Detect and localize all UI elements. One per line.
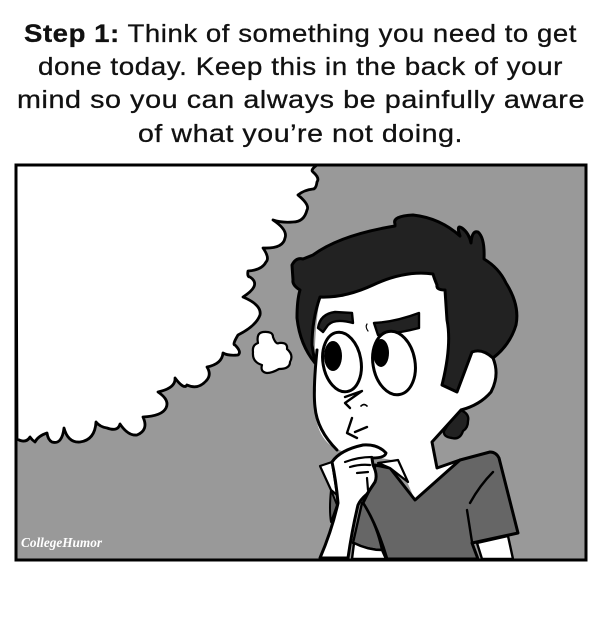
- right eyebrow: [374, 313, 419, 335]
- left eyebrow: [318, 312, 353, 332]
- heading: step 1 caption: mind so you can always be painfully aware: [17, 86, 585, 114]
- panel border: [16, 165, 586, 560]
- left eye: [318, 329, 366, 395]
- hair bump behind neck: [444, 409, 468, 438]
- heading: step 1 caption: Step 1: Think of something you need to get: [24, 20, 577, 48]
- neck and ear outline: [432, 358, 496, 468]
- panel background: [16, 165, 586, 560]
- logo: CollegeHumor: CollegeHumor: [21, 536, 103, 551]
- heading: step 1 caption: done today. Keep this in the back of your: [38, 53, 563, 81]
- heading: step 1 caption: of what you’re not doing.: [138, 120, 463, 148]
- nose: [345, 391, 362, 408]
- mouth: [347, 418, 367, 438]
- right arm: [477, 536, 513, 559]
- jaw outline: [314, 350, 337, 450]
- face and neck: [315, 272, 497, 500]
- left pupil: [324, 341, 342, 371]
- thought bubble: [16, 165, 318, 442]
- back sleeve: [330, 490, 337, 522]
- sleeve crease: [467, 472, 493, 542]
- fingers: [345, 457, 372, 490]
- shirt sliver beside forearm: [353, 503, 382, 550]
- right eye: [368, 328, 420, 398]
- back collar: [320, 462, 337, 495]
- character: [292, 215, 518, 559]
- small thought puff: [253, 332, 291, 373]
- panel: comic scene: [16, 165, 586, 560]
- heading: step 1 caption: [17, 20, 585, 148]
- forehead wrinkle: [366, 324, 368, 331]
- hand and forearm: [320, 445, 386, 558]
- white collar sliver: [378, 460, 408, 482]
- hair: [292, 215, 517, 392]
- right pupil: [373, 339, 389, 367]
- lower left arm gap: [352, 543, 386, 559]
- nostril: [361, 404, 367, 406]
- shirt: [363, 452, 518, 559]
